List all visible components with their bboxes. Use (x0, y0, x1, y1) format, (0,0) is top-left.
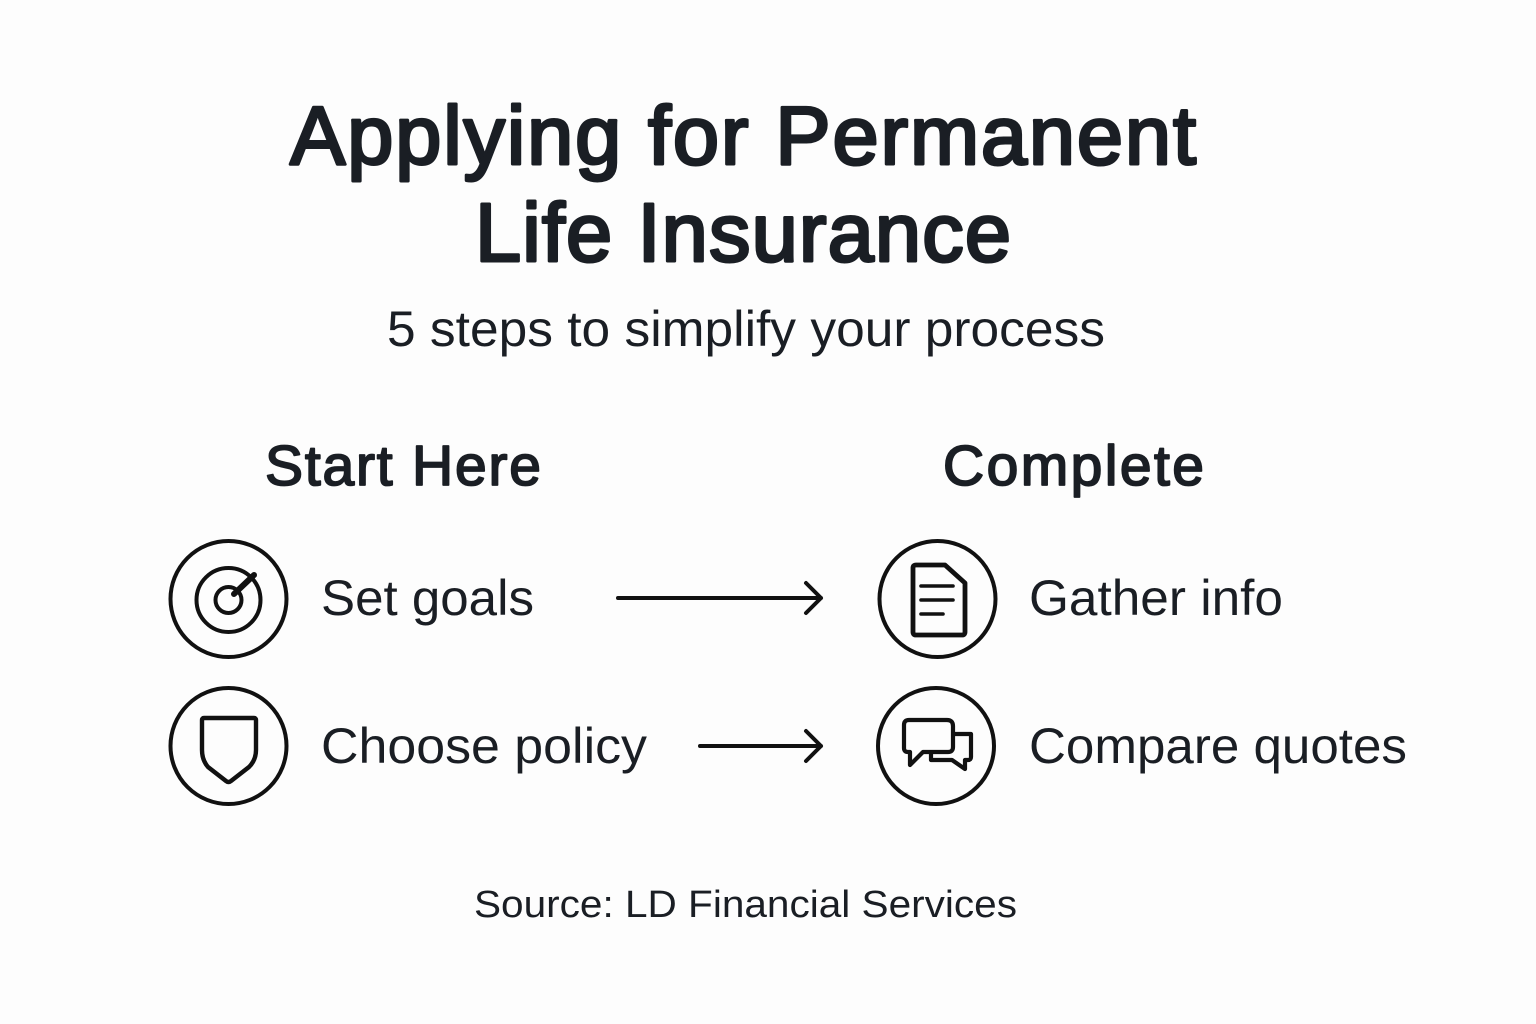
icon: shield (170, 688, 286, 804)
icon: chat bubbles (878, 688, 994, 804)
heading: start here: Start Here (265, 434, 541, 498)
heading: complete: Complete (943, 434, 1204, 498)
title: Life Insurance (475, 186, 1011, 279)
arrow: choose policy to compare quotes (700, 731, 821, 761)
title (290, 89, 1196, 279)
subtitle: 5 steps to simplify your process (387, 301, 1105, 357)
source note: Source: LD Financial Services (474, 884, 1017, 926)
label: choose policy: Choose policy (321, 718, 647, 774)
icon: target (170, 541, 286, 657)
title: Applying for Permanent (290, 89, 1196, 182)
arrow: set goals to gather info (618, 583, 821, 613)
label: set goals: Set goals (321, 570, 534, 626)
icon: document (880, 541, 996, 657)
label: compare quotes: Compare quotes (1029, 718, 1407, 774)
label: gather info: Gather info (1029, 570, 1283, 626)
